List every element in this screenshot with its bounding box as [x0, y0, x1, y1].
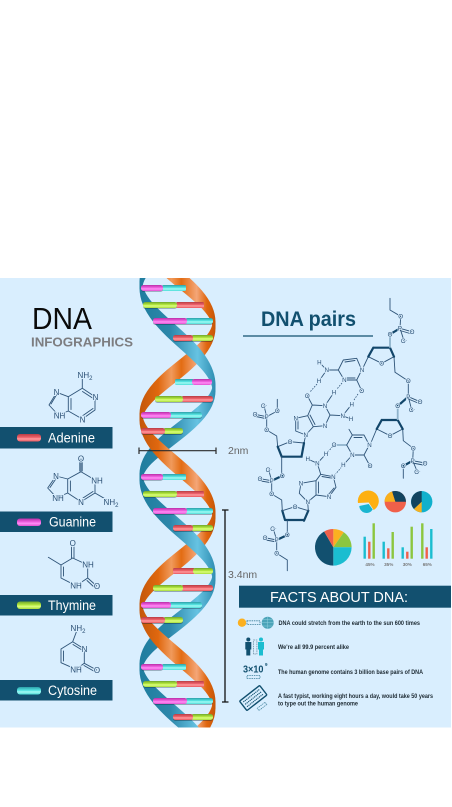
legend: thymine [0, 595, 112, 616]
diagram: DNA base pair structure: O [406, 378, 411, 385]
DNA double helix [140, 278, 216, 728]
diagram: DNA base pair structure: N [315, 460, 320, 468]
pie chart: small teal [411, 491, 432, 512]
diagram: DNA base pair structure: O [401, 338, 406, 345]
heading: DNA pairs [243, 308, 373, 336]
icon: thymine molecule [48, 539, 100, 591]
diagram: DNA base pair structure: O [398, 314, 403, 320]
measure: 3.4nm [222, 510, 257, 702]
diagram: DNA base pair structure: O [269, 491, 274, 498]
heading: facts about DNA [239, 586, 451, 608]
icon: thymine molecule: O [70, 539, 76, 548]
diagram: DNA base pair structure: O [418, 399, 423, 406]
title [31, 301, 133, 350]
diagram: DNA base pair structure: H [349, 416, 353, 423]
icon: adenine molecule: NH [78, 371, 89, 380]
diagram: DNA base pair structure: O [270, 526, 275, 533]
diagram: DNA base pair structure: O [293, 504, 298, 511]
measure: 2nm: 2nm [228, 445, 249, 457]
icon: cytosine molecule: NH [71, 624, 82, 633]
diagram: DNA base pair structure: O [261, 403, 266, 410]
icon: guanine molecule: 2 [115, 503, 119, 509]
diagram: DNA base pair structure: O [258, 476, 263, 483]
icon: adenine molecule [49, 371, 99, 424]
diagram: DNA base pair structure: H [305, 456, 310, 463]
legend: cytosine [0, 680, 112, 700]
diagram: DNA base pair structure: O [253, 412, 258, 418]
diagram: DNA base pair structure: H [341, 462, 346, 469]
diagram: DNA base pair structure: O [410, 329, 415, 336]
diagram: DNA base pair structure: O [423, 460, 428, 468]
diagram: DNA base pair structure: O [266, 467, 270, 474]
diagram: DNA base pair structure: O [395, 403, 400, 410]
icon: adenine molecule: 2 [89, 376, 93, 382]
icon: guanine molecule: NH [52, 494, 64, 503]
heading: DNA pairs: DNA pairs [261, 308, 356, 331]
diagram: DNA base pair structure: N [340, 413, 345, 420]
diagram: DNA base pair structure: O [401, 463, 406, 470]
legend: adenine [0, 427, 112, 448]
icon: cytosine molecule: NH [70, 666, 82, 674]
diagram: DNA base pair structure: H [349, 402, 354, 408]
icon: thymine molecule: O [94, 582, 100, 591]
diagram: DNA base pair structure: O [280, 473, 285, 480]
fact: earth to sun: DNA could stretch from the earth to the sun 600 times [278, 620, 420, 627]
diagram: DNA base pair structure: - [275, 525, 277, 530]
fact: fast typist: to type out the human genome [278, 700, 358, 708]
diagram: DNA base pair structure: N [342, 377, 347, 384]
legend: guanine [0, 512, 112, 532]
icon: adenine molecule: N [54, 388, 60, 397]
icon: guanine molecule: O [78, 454, 84, 464]
diagram: DNA base pair structure: O [368, 463, 373, 470]
diagram: DNA base pair structure: N [303, 432, 308, 439]
diagram: DNA base pair structure: O [414, 469, 419, 476]
measure: 2nm [139, 445, 249, 457]
diagram: DNA base pair structure: O [388, 332, 393, 338]
bar chart [364, 523, 432, 567]
diagram: DNA base pair structure: P [265, 414, 269, 421]
diagram: DNA base pair structure: N [331, 474, 336, 481]
diagram: DNA base pair structure: H [332, 390, 336, 396]
bar chart: 35% [384, 562, 393, 567]
bar chart: 30% [403, 562, 412, 567]
diagram: DNA base pair structure: - [266, 402, 268, 407]
fact: 99.9 percent alike [245, 638, 350, 656]
bar chart: 65% [423, 562, 432, 567]
diagram: DNA base pair structure: N [350, 452, 355, 459]
diagram: DNA base pair structure [253, 298, 428, 571]
fact: 99.9 percent alike: We're all 99.9 percent alike [278, 644, 350, 651]
diagram: DNA base pair structure: P [411, 458, 415, 465]
diagram: DNA base pair structure: N [299, 480, 303, 488]
diagram: DNA base pair structure: O [288, 439, 293, 446]
icon: cytosine molecule: N [82, 645, 88, 654]
diagram: DNA base pair structure: N [360, 367, 364, 374]
diagram: DNA base pair structure: O [285, 532, 290, 539]
diagram: DNA base pair structure: O [359, 388, 364, 395]
diagram: DNA base pair structure: N [293, 416, 298, 422]
diagram: DNA base pair structure: O [409, 407, 414, 414]
diagram: DNA base pair structure: O [379, 360, 384, 368]
icon: thymine molecule: NH [70, 582, 82, 590]
diagram: DNA base pair structure: O [305, 393, 310, 400]
diagram: DNA base pair structure: N [323, 403, 327, 410]
icon: guanine molecule [48, 454, 119, 509]
fact: fast typist: A fast typist, working eight hours a day, would take 50 years [278, 693, 433, 700]
pie chart: small navy and red [385, 491, 406, 512]
background panel [0, 278, 451, 728]
icon: adenine molecule: NH [54, 412, 65, 420]
diagram: DNA base pair structure: - [270, 466, 272, 471]
diagram: DNA base pair structure: O [264, 427, 269, 434]
icon: cytosine molecule: 2 [82, 629, 86, 635]
diagram: DNA base pair structure: O [275, 408, 280, 415]
legend: cytosine: Cytosine [48, 683, 97, 698]
diagram: DNA base pair structure: N [324, 367, 329, 374]
diagram: DNA base pair structure: H [317, 378, 321, 385]
diagram: DNA base pair structure: P [398, 326, 402, 332]
fact: 3 billion base pairs [243, 662, 423, 678]
diagram: DNA base pair structure: N [367, 442, 372, 449]
pie chart: small orange [358, 490, 379, 513]
diagram: DNA base pair structure: - [406, 337, 408, 342]
icon: adenine molecule: N [80, 416, 86, 424]
diagram: DNA base pair structure: P [275, 537, 279, 544]
fact: fast typist [240, 685, 433, 711]
diagram: DNA base pair structure: N [323, 423, 327, 430]
bar chart: 45% [365, 562, 375, 567]
diagram: DNA base pair structure: - [414, 406, 416, 411]
measure: 3.4nm: 3.4nm [228, 569, 257, 581]
title: DNA [32, 301, 92, 336]
icon: guanine molecule: N [78, 498, 84, 507]
fact: 3 billion base pairs: The human genome contains 3 billion base pairs of DNA [278, 669, 423, 676]
legend: adenine: Adenine [48, 430, 95, 446]
icon: adenine molecule: N [93, 393, 99, 402]
diagram: DNA base pair structure: O [411, 446, 416, 452]
icon: cytosine molecule: O [94, 666, 100, 675]
diagram: DNA base pair structure: P [270, 478, 274, 485]
legend: thymine: Thymine [48, 598, 96, 613]
icon: guanine molecule: NH [91, 476, 103, 486]
icon: guanine molecule: N [53, 472, 59, 481]
diagram: DNA base pair structure: N [327, 494, 331, 501]
diagram: DNA base pair structure: N [305, 499, 310, 506]
diagram: DNA base pair structure: O [332, 442, 337, 449]
icon: guanine molecule: NH [104, 498, 115, 507]
pie chart: large [315, 529, 352, 566]
diagram: DNA base pair structure: H [324, 451, 328, 458]
diagram: DNA base pair structure: O [388, 433, 393, 440]
title: INFOGRAPHICS [31, 334, 133, 350]
diagram: DNA base pair structure: O [274, 550, 279, 558]
fact: 3 billion base pairs: 3×10 [243, 664, 264, 676]
diagram: DNA base pair structure: P [406, 394, 410, 401]
icon: cytosine molecule [61, 624, 100, 675]
diagram: DNA base pair structure: O [263, 535, 268, 542]
diagram: DNA base pair structure: - [419, 468, 421, 473]
fact: earth to sun [238, 617, 420, 629]
diagram: DNA base pair structure: H [317, 360, 322, 366]
fact: 3 billion base pairs: 9 [265, 662, 268, 667]
heading: facts about DNA: FACTS ABOUT DNA: [270, 589, 408, 606]
legend: guanine: Guanine [49, 514, 96, 530]
icon: thymine molecule: NH [82, 560, 94, 570]
